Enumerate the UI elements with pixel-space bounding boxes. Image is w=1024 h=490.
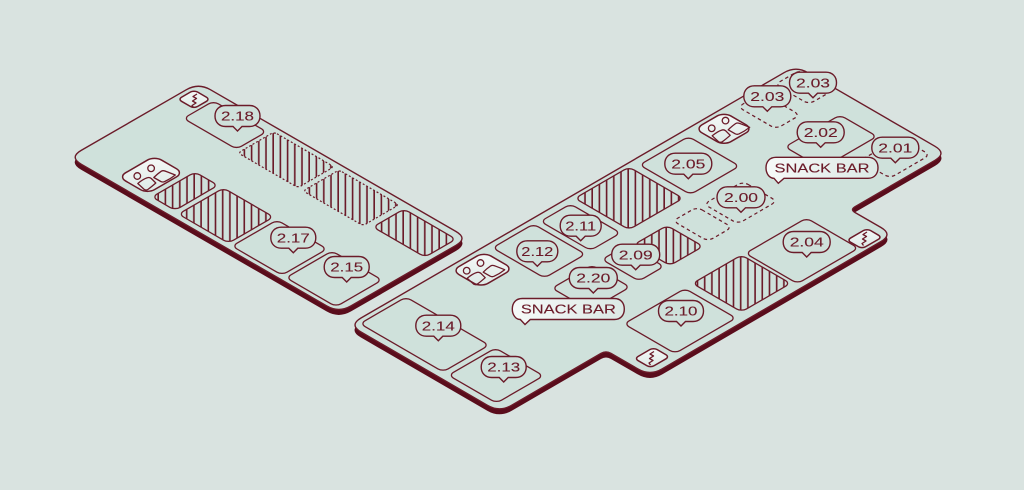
hatched dashed room 1 — [238, 132, 334, 188]
label 2.18 — [215, 106, 260, 131]
label 2.09 — [612, 244, 660, 270]
panel: right floor platform — [355, 69, 941, 414]
label 2.04 — [783, 232, 830, 257]
label 2.03 left: 2.03 — [750, 89, 784, 104]
hatched room beside 2.09 — [634, 226, 703, 266]
platform edge: left — [75, 91, 462, 314]
platform surface: left — [75, 86, 462, 309]
label 2.18: 2.18 — [221, 109, 254, 124]
label 2.09: 2.09 — [619, 247, 653, 262]
label 2.11: 2.11 — [565, 218, 596, 233]
icon: restroom people left — [118, 156, 184, 194]
label 2.20 — [569, 268, 617, 293]
room 2.15 — [286, 251, 382, 307]
label 2.17 — [271, 227, 316, 253]
label 2.01: 2.01 — [878, 140, 912, 155]
label 2.03 right — [790, 72, 836, 98]
room 2.12 — [492, 224, 586, 278]
hatched room lower — [692, 255, 790, 312]
label 2.12: 2.12 — [521, 244, 553, 259]
label 2.02: 2.02 — [804, 125, 838, 140]
label 2.10: 2.10 — [664, 304, 698, 319]
label 2.17: 2.17 — [277, 230, 310, 245]
label 2.13: 2.13 — [487, 360, 520, 375]
label 2.10 — [658, 300, 704, 326]
label: snack bar upper: SNACK BAR — [775, 161, 869, 176]
label: snack bar upper — [766, 157, 878, 183]
room 2.20 — [552, 265, 630, 310]
room 2.11 — [540, 204, 620, 250]
room 2.18 — [184, 101, 266, 149]
label: snack bar lower — [512, 298, 624, 324]
panel: left floor platform — [75, 86, 462, 314]
label 2.05 — [665, 153, 712, 179]
room 2.09 — [602, 245, 664, 281]
label 2.04: 2.04 — [790, 235, 824, 250]
room 2.17 — [232, 220, 327, 275]
icon: power zigzag right — [847, 228, 882, 249]
label: snack bar lower: SNACK BAR — [521, 302, 616, 317]
label 2.00 — [717, 187, 765, 212]
hatched room large — [178, 188, 274, 243]
label 2.11 — [560, 215, 601, 241]
label 2.03 right: 2.03 — [796, 75, 830, 90]
dashed room 2.01 — [860, 138, 930, 178]
label 2.13 — [481, 356, 526, 382]
room 2.04 — [746, 218, 858, 284]
hatched room small — [152, 172, 218, 210]
dashed room 2.03 left — [738, 93, 800, 129]
icon: restroom people upper — [695, 112, 753, 146]
dashed room 2.00 — [704, 182, 777, 224]
dashed room 2.03 right — [775, 70, 834, 104]
room 2.14 — [360, 297, 489, 372]
platform surface: right — [355, 69, 941, 409]
dashed room below 2.00 — [673, 207, 732, 241]
label 2.02 — [797, 122, 844, 147]
label 2.05: 2.05 — [671, 156, 705, 171]
room 2.10 — [624, 288, 736, 353]
hatched room large centre — [575, 167, 683, 230]
label 2.12 — [517, 241, 558, 266]
room 2.05 — [640, 136, 740, 194]
label 2.15 — [324, 256, 369, 282]
hatched dashed room 2 — [303, 170, 399, 226]
icon: power zigzag top — [178, 90, 210, 109]
icon: power zigzag bottom — [634, 348, 670, 368]
label 2.20: 2.20 — [576, 271, 610, 286]
label 2.00: 2.00 — [724, 190, 758, 205]
room 2.02 — [785, 115, 877, 168]
platform edge: right — [355, 74, 941, 414]
icon: restroom people lower — [452, 252, 513, 287]
label 2.03 left — [744, 86, 791, 111]
label 2.15: 2.15 — [330, 260, 363, 275]
hatched room right — [373, 209, 456, 257]
label 2.14: 2.14 — [422, 318, 455, 333]
room 2.13 — [448, 348, 544, 403]
label 2.14 — [416, 315, 461, 341]
label 2.01 — [872, 137, 919, 163]
